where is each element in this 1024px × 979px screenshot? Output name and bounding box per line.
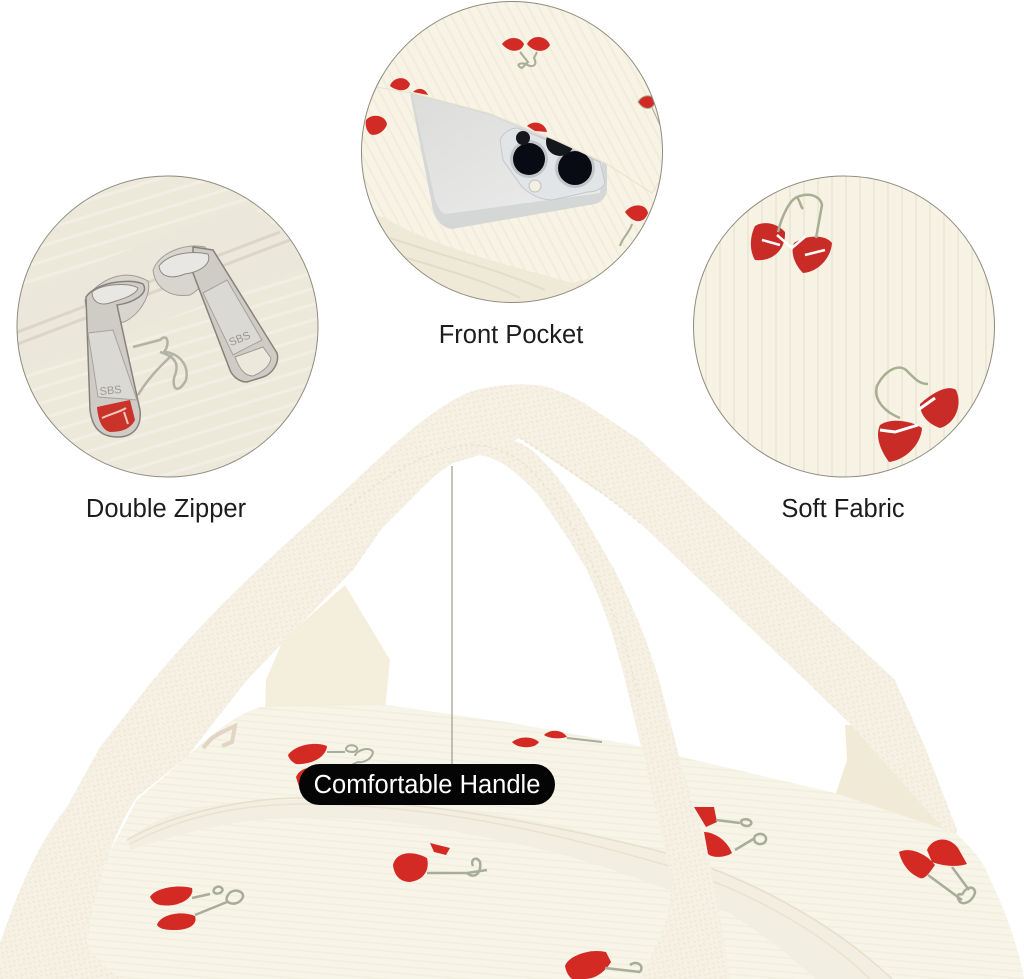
handle seams xyxy=(345,438,640,700)
cherries on pocket xyxy=(366,37,660,246)
panel: front pocket xyxy=(360,0,680,310)
engraved mark right: SBS xyxy=(227,330,252,349)
bag photo xyxy=(0,384,1024,979)
zipper band xyxy=(127,800,892,979)
handle tab right xyxy=(835,725,957,840)
print 3 xyxy=(288,744,327,790)
print 1 xyxy=(150,886,196,930)
front handle xyxy=(345,435,730,979)
phone xyxy=(410,93,607,229)
print 2 xyxy=(393,843,450,882)
panel: soft fabric xyxy=(690,175,1000,480)
faint cherry print xyxy=(133,337,187,395)
label: soft fabric: Soft Fabric xyxy=(781,495,905,523)
leader line xyxy=(451,466,453,766)
lower fold xyxy=(376,216,594,302)
print 7 xyxy=(565,951,611,979)
cherries bottom xyxy=(876,368,959,462)
zipper pull left xyxy=(85,275,149,437)
print 8 xyxy=(203,726,235,748)
handle tab left xyxy=(265,585,390,710)
callout: comfortable handle xyxy=(299,764,555,805)
zipper pull right xyxy=(153,246,278,382)
bag body xyxy=(60,705,1024,979)
print 6 xyxy=(899,840,967,878)
panel: double zipper xyxy=(15,175,320,480)
rear handle xyxy=(0,384,957,979)
cherries top xyxy=(751,195,832,273)
print 4 xyxy=(512,731,567,747)
print 5 xyxy=(694,807,732,857)
pocket flap xyxy=(377,87,659,194)
label: front pocket: Front Pocket xyxy=(439,321,583,349)
callout: comfortable handle: Comfortable Handle xyxy=(314,771,540,799)
label: double zipper: Double Zipper xyxy=(86,495,247,523)
engraved mark left: SBS xyxy=(99,384,122,398)
bag cherry prints xyxy=(150,726,975,979)
